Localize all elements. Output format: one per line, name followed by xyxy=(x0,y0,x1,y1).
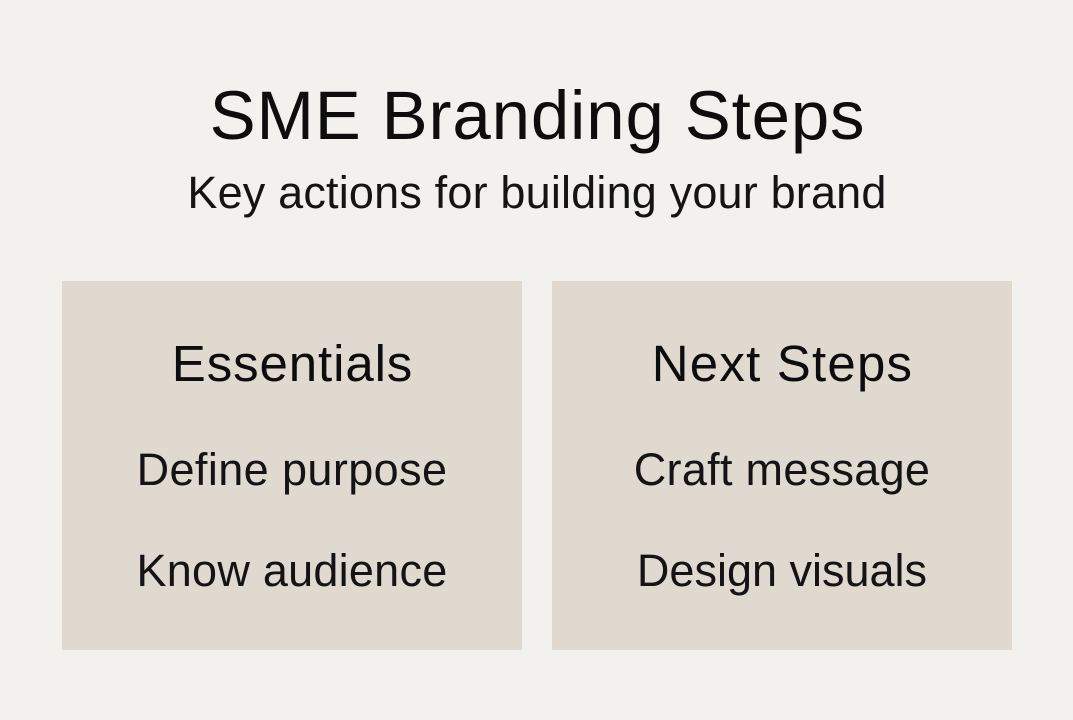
heading: next steps: Next Steps xyxy=(652,335,913,392)
heading: essentials: Essentials xyxy=(172,335,413,392)
item: craft message: Craft message xyxy=(634,444,930,495)
panel: essentials xyxy=(62,281,522,650)
title: SME Branding Steps xyxy=(210,77,865,154)
item: define purpose: Define purpose xyxy=(137,444,447,495)
item: design visuals: Design visuals xyxy=(637,545,927,596)
subtitle: Key actions for building your brand xyxy=(187,167,887,218)
panel: next steps xyxy=(552,281,1012,650)
item: know audience: Know audience xyxy=(137,545,447,596)
